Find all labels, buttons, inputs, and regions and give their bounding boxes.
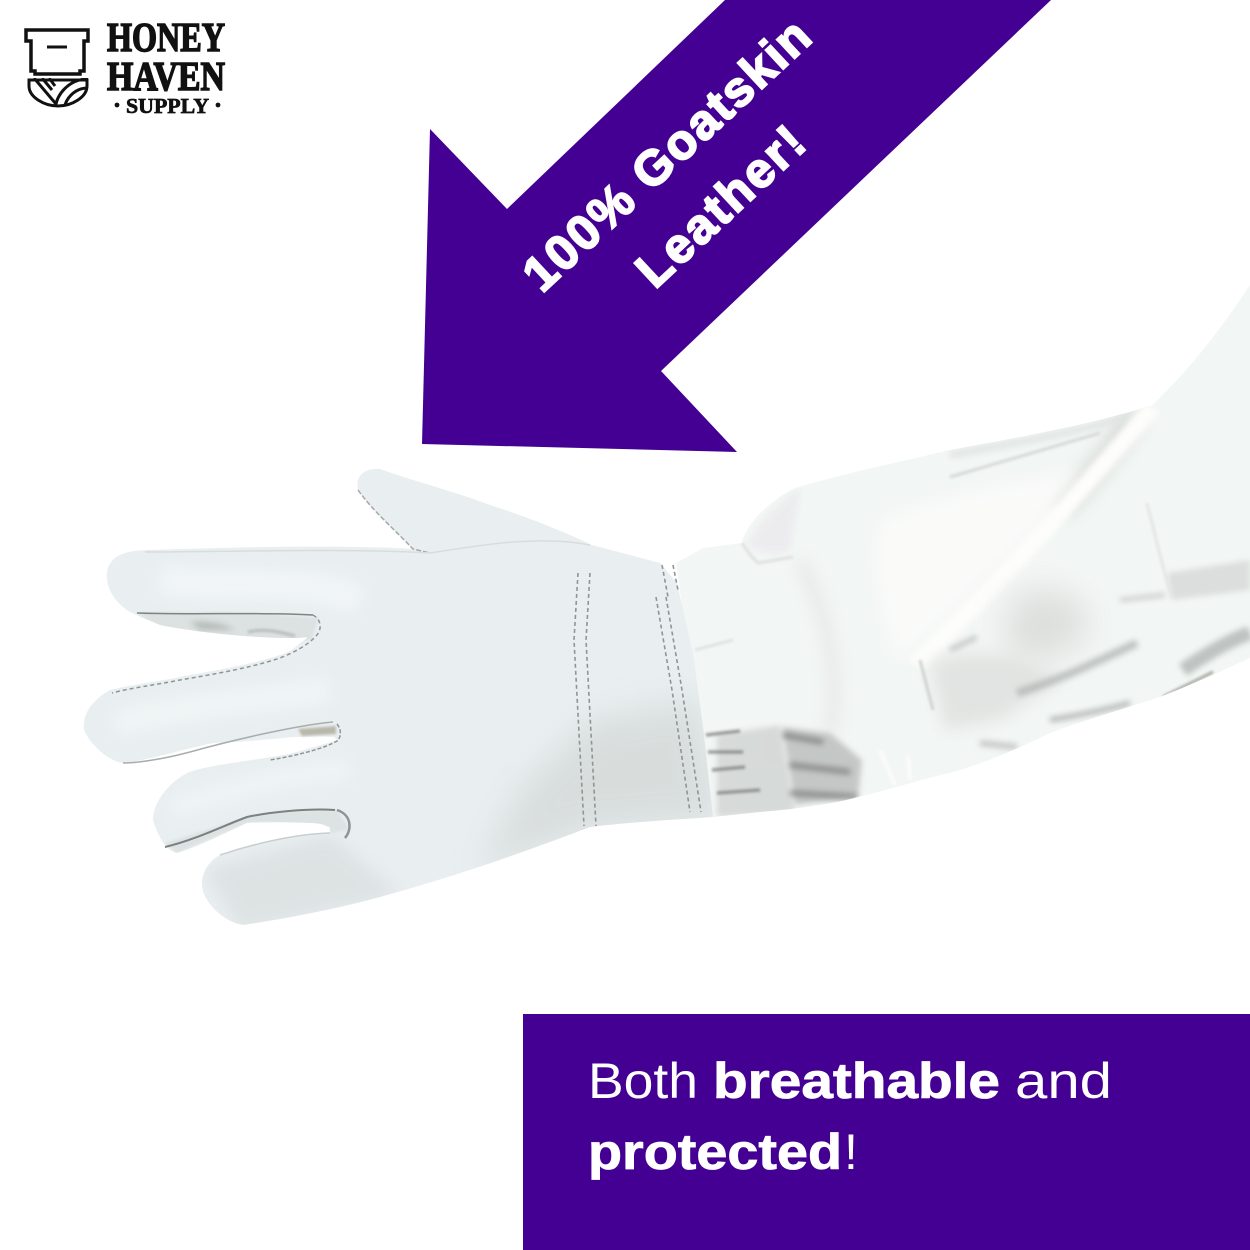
elastic wrist ruffle <box>717 725 795 817</box>
logo wordmark <box>107 14 225 118</box>
arrow label: Leather! <box>626 115 816 298</box>
upper fold shadows <box>1060 415 1135 510</box>
bottom fold lines <box>1017 643 1137 693</box>
glove shading <box>494 702 712 858</box>
glove finger seams <box>112 490 590 855</box>
panel text: protected <box>588 1124 842 1180</box>
central crest <box>915 407 1153 665</box>
logo wordmark: HAVEN <box>107 53 225 99</box>
panel text: ! <box>844 1124 858 1180</box>
logo icon: hive box and honeycomb shield <box>24 28 90 108</box>
right side bands <box>1167 560 1250 600</box>
gap between ring and little finger <box>222 824 330 852</box>
arrow label: 100% Goatskin <box>513 9 822 302</box>
panel text: and <box>1015 1053 1112 1109</box>
logo: Honey Haven Supply <box>24 23 226 114</box>
photo: leather glove <box>84 469 720 930</box>
photo: sleeve <box>676 285 1250 817</box>
logo wordmark: HONEY <box>107 14 225 60</box>
panel: breathable and protected <box>523 1014 1250 1250</box>
panel text: breathable <box>713 1053 1000 1109</box>
glove cuff stitching <box>574 565 701 826</box>
panel text <box>588 1053 1112 1180</box>
arrow: callout pointing at glove <box>422 0 1051 452</box>
logo wordmark: SUPPLY <box>126 94 209 118</box>
panel text: Both <box>588 1053 698 1109</box>
